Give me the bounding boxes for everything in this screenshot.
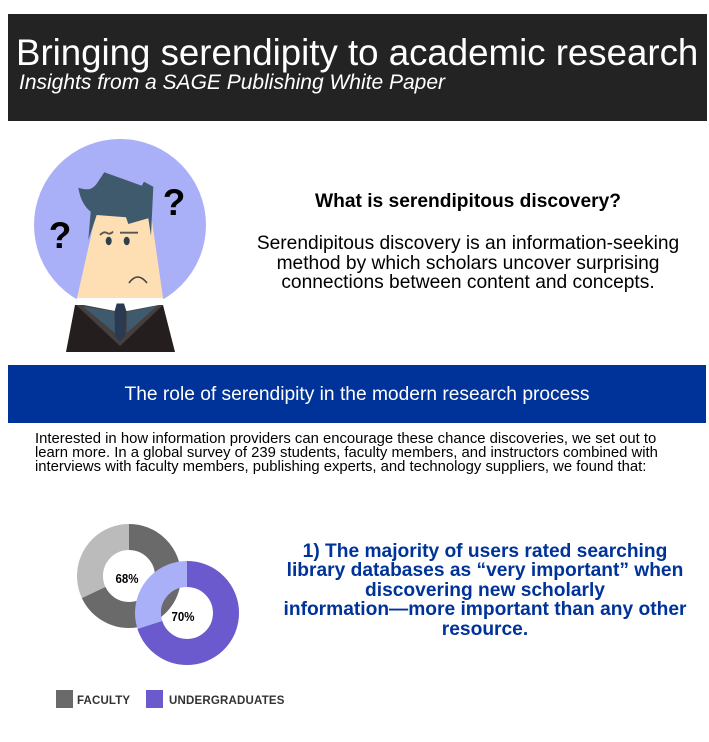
- header banner: [8, 14, 707, 121]
- icon: right question mark: ?: [163, 182, 185, 223]
- finding text: resource.: [442, 619, 528, 640]
- legend swatch: faculty: [56, 690, 73, 708]
- intro paragraph: interviews with faculty members, publishing experts, and technology suppliers, we found that:: [35, 459, 646, 475]
- definition text: [257, 233, 679, 293]
- title: Bringing serendipity to academic research: [16, 32, 698, 73]
- icon: mouth: [129, 277, 147, 283]
- section band: [8, 365, 706, 423]
- legend label: undergraduates: UNDERGRADUATES: [169, 695, 285, 707]
- definition text: method by which scholars uncover surprising: [277, 253, 659, 274]
- intro paragraph: [35, 431, 658, 475]
- finding text: 1) The majority of users rated searching: [303, 541, 667, 562]
- icon: face: [77, 214, 163, 298]
- undergraduates value: 70%: [172, 609, 195, 624]
- icon: tie: [114, 304, 126, 342]
- icon: lapels: [83, 306, 157, 333]
- icon: collar: [76, 298, 164, 311]
- finding text: information—more important than any other: [284, 599, 686, 620]
- icon: jacket: [66, 305, 175, 352]
- chart: undergraduates donut: [148, 574, 226, 652]
- legend swatch: undergraduates: [146, 690, 163, 708]
- definition text: connections between content and concepts.: [281, 272, 655, 293]
- finding text: [284, 541, 686, 640]
- icon: left question mark: ?: [49, 215, 71, 256]
- faculty value: 68%: [116, 571, 139, 586]
- icon: hair: [78, 172, 153, 240]
- finding text: discovering new scholarly: [365, 580, 605, 601]
- section heading: The role of serendipity in the modern research process: [124, 384, 590, 405]
- donut charts: [77, 524, 239, 665]
- icon: eyes: [106, 237, 130, 245]
- definition text: Serendipitous discovery is an information-seeking: [257, 233, 679, 254]
- definition heading: What is serendipitous discovery?: [315, 191, 621, 212]
- icon: lapel shade: [76, 305, 163, 346]
- chart: faculty donut: [90, 537, 168, 615]
- subtitle: Insights from a SAGE Publishing White Paper: [19, 71, 445, 94]
- illustration: confused man: [34, 139, 206, 352]
- chart: faculty ring seen through donut hole: [161, 588, 180, 617]
- finding text: library databases as “very important” when: [287, 560, 683, 581]
- legend label: faculty: FACULTY: [77, 695, 130, 707]
- intro paragraph: learn more. In a global survey of 239 students, faculty members, and instructors combined with: [35, 445, 658, 461]
- icon: eyebrows: [100, 232, 138, 235]
- icon: blue circle: [34, 139, 206, 311]
- intro paragraph: Interested in how information providers can encourage these chance discoveries, we set out to: [35, 431, 656, 447]
- legend: [56, 690, 285, 708]
